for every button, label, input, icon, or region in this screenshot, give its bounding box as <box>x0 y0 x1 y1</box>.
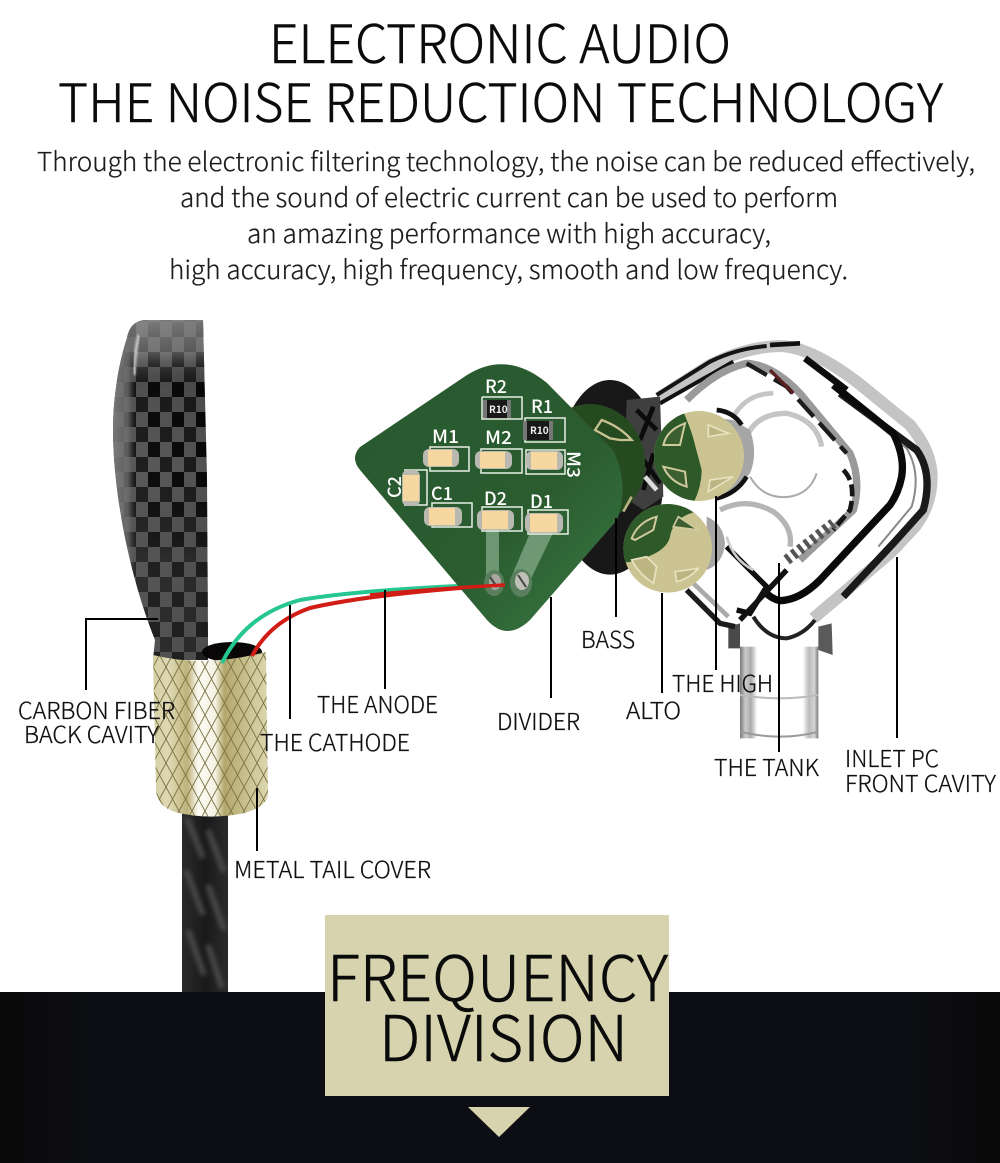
part labels: CARBON FIBER <box>18 692 175 726</box>
wire ends on pads <box>370 585 505 595</box>
icon: high driver <box>653 407 754 503</box>
component labels: C1 <box>431 480 453 506</box>
panel: divider circuit board <box>355 364 623 631</box>
description text: Through the electronic filtering technology, the noise can be reduced effectively, <box>37 142 975 179</box>
part labels <box>18 621 996 885</box>
outer body band <box>658 346 932 618</box>
title: THE NOISE REDUCTION TECHNOLOGY <box>58 62 943 138</box>
icon: bass driver <box>535 380 663 575</box>
component labels: M1 <box>432 423 459 449</box>
icon: down arrow <box>468 1107 530 1137</box>
icon: alto driver <box>620 497 725 593</box>
description text <box>37 142 975 287</box>
part labels: BASS <box>581 621 635 655</box>
component labels: M3 <box>561 451 587 478</box>
title: ELECTRONIC AUDIO <box>269 3 731 79</box>
title <box>58 3 943 138</box>
part labels: FRONT CAVITY <box>845 765 996 799</box>
leader lines <box>86 496 897 851</box>
heading box: frequency division <box>325 915 669 1096</box>
part labels: THE TANK <box>714 749 820 783</box>
part labels: DIVIDER <box>497 703 580 737</box>
icon: clear inlet PC front cavity shell <box>657 343 932 738</box>
resistors: R10 <box>530 422 549 437</box>
component labels: M2 <box>485 424 512 450</box>
tube <box>728 623 833 738</box>
part labels: BACK CAVITY <box>24 716 159 750</box>
heading box: frequency division: FREQUENCY <box>327 929 668 1020</box>
icon: cable <box>182 812 228 992</box>
bores <box>747 413 822 447</box>
capacitors <box>402 449 563 533</box>
description text: high accuracy, high frequency, smooth and low frequency. <box>169 250 848 287</box>
resistors: R10 <box>489 401 508 416</box>
solder pads <box>484 569 532 597</box>
description text: and the sound of electric current can be used to perform <box>180 178 838 215</box>
part labels: THE ANODE <box>317 686 438 720</box>
component labels: C2 <box>381 476 407 498</box>
component labels: R2 <box>485 373 507 399</box>
inner body <box>687 363 857 560</box>
silkscreen outlines <box>404 397 568 534</box>
part labels: INLET PC <box>845 740 939 774</box>
part labels: THE HIGH <box>672 665 773 699</box>
wires <box>222 585 500 663</box>
icon: carbon fiber back cavity <box>110 318 210 663</box>
part labels: THE CATHODE <box>260 724 410 758</box>
heading box: frequency division: DIVISION <box>379 989 628 1080</box>
panel: bottom black band <box>0 992 1000 1163</box>
component labels <box>381 373 587 514</box>
description text: an amazing performance with high accuracy, <box>247 214 771 251</box>
part labels: METAL TAIL COVER <box>234 851 431 885</box>
part labels: ALTO <box>626 692 681 726</box>
traces <box>486 530 553 585</box>
component labels: R1 <box>531 393 553 419</box>
component labels: D2 <box>484 485 507 511</box>
icon: metal tail cover <box>153 642 268 817</box>
resistors <box>483 400 553 440</box>
component labels: D1 <box>530 488 553 514</box>
